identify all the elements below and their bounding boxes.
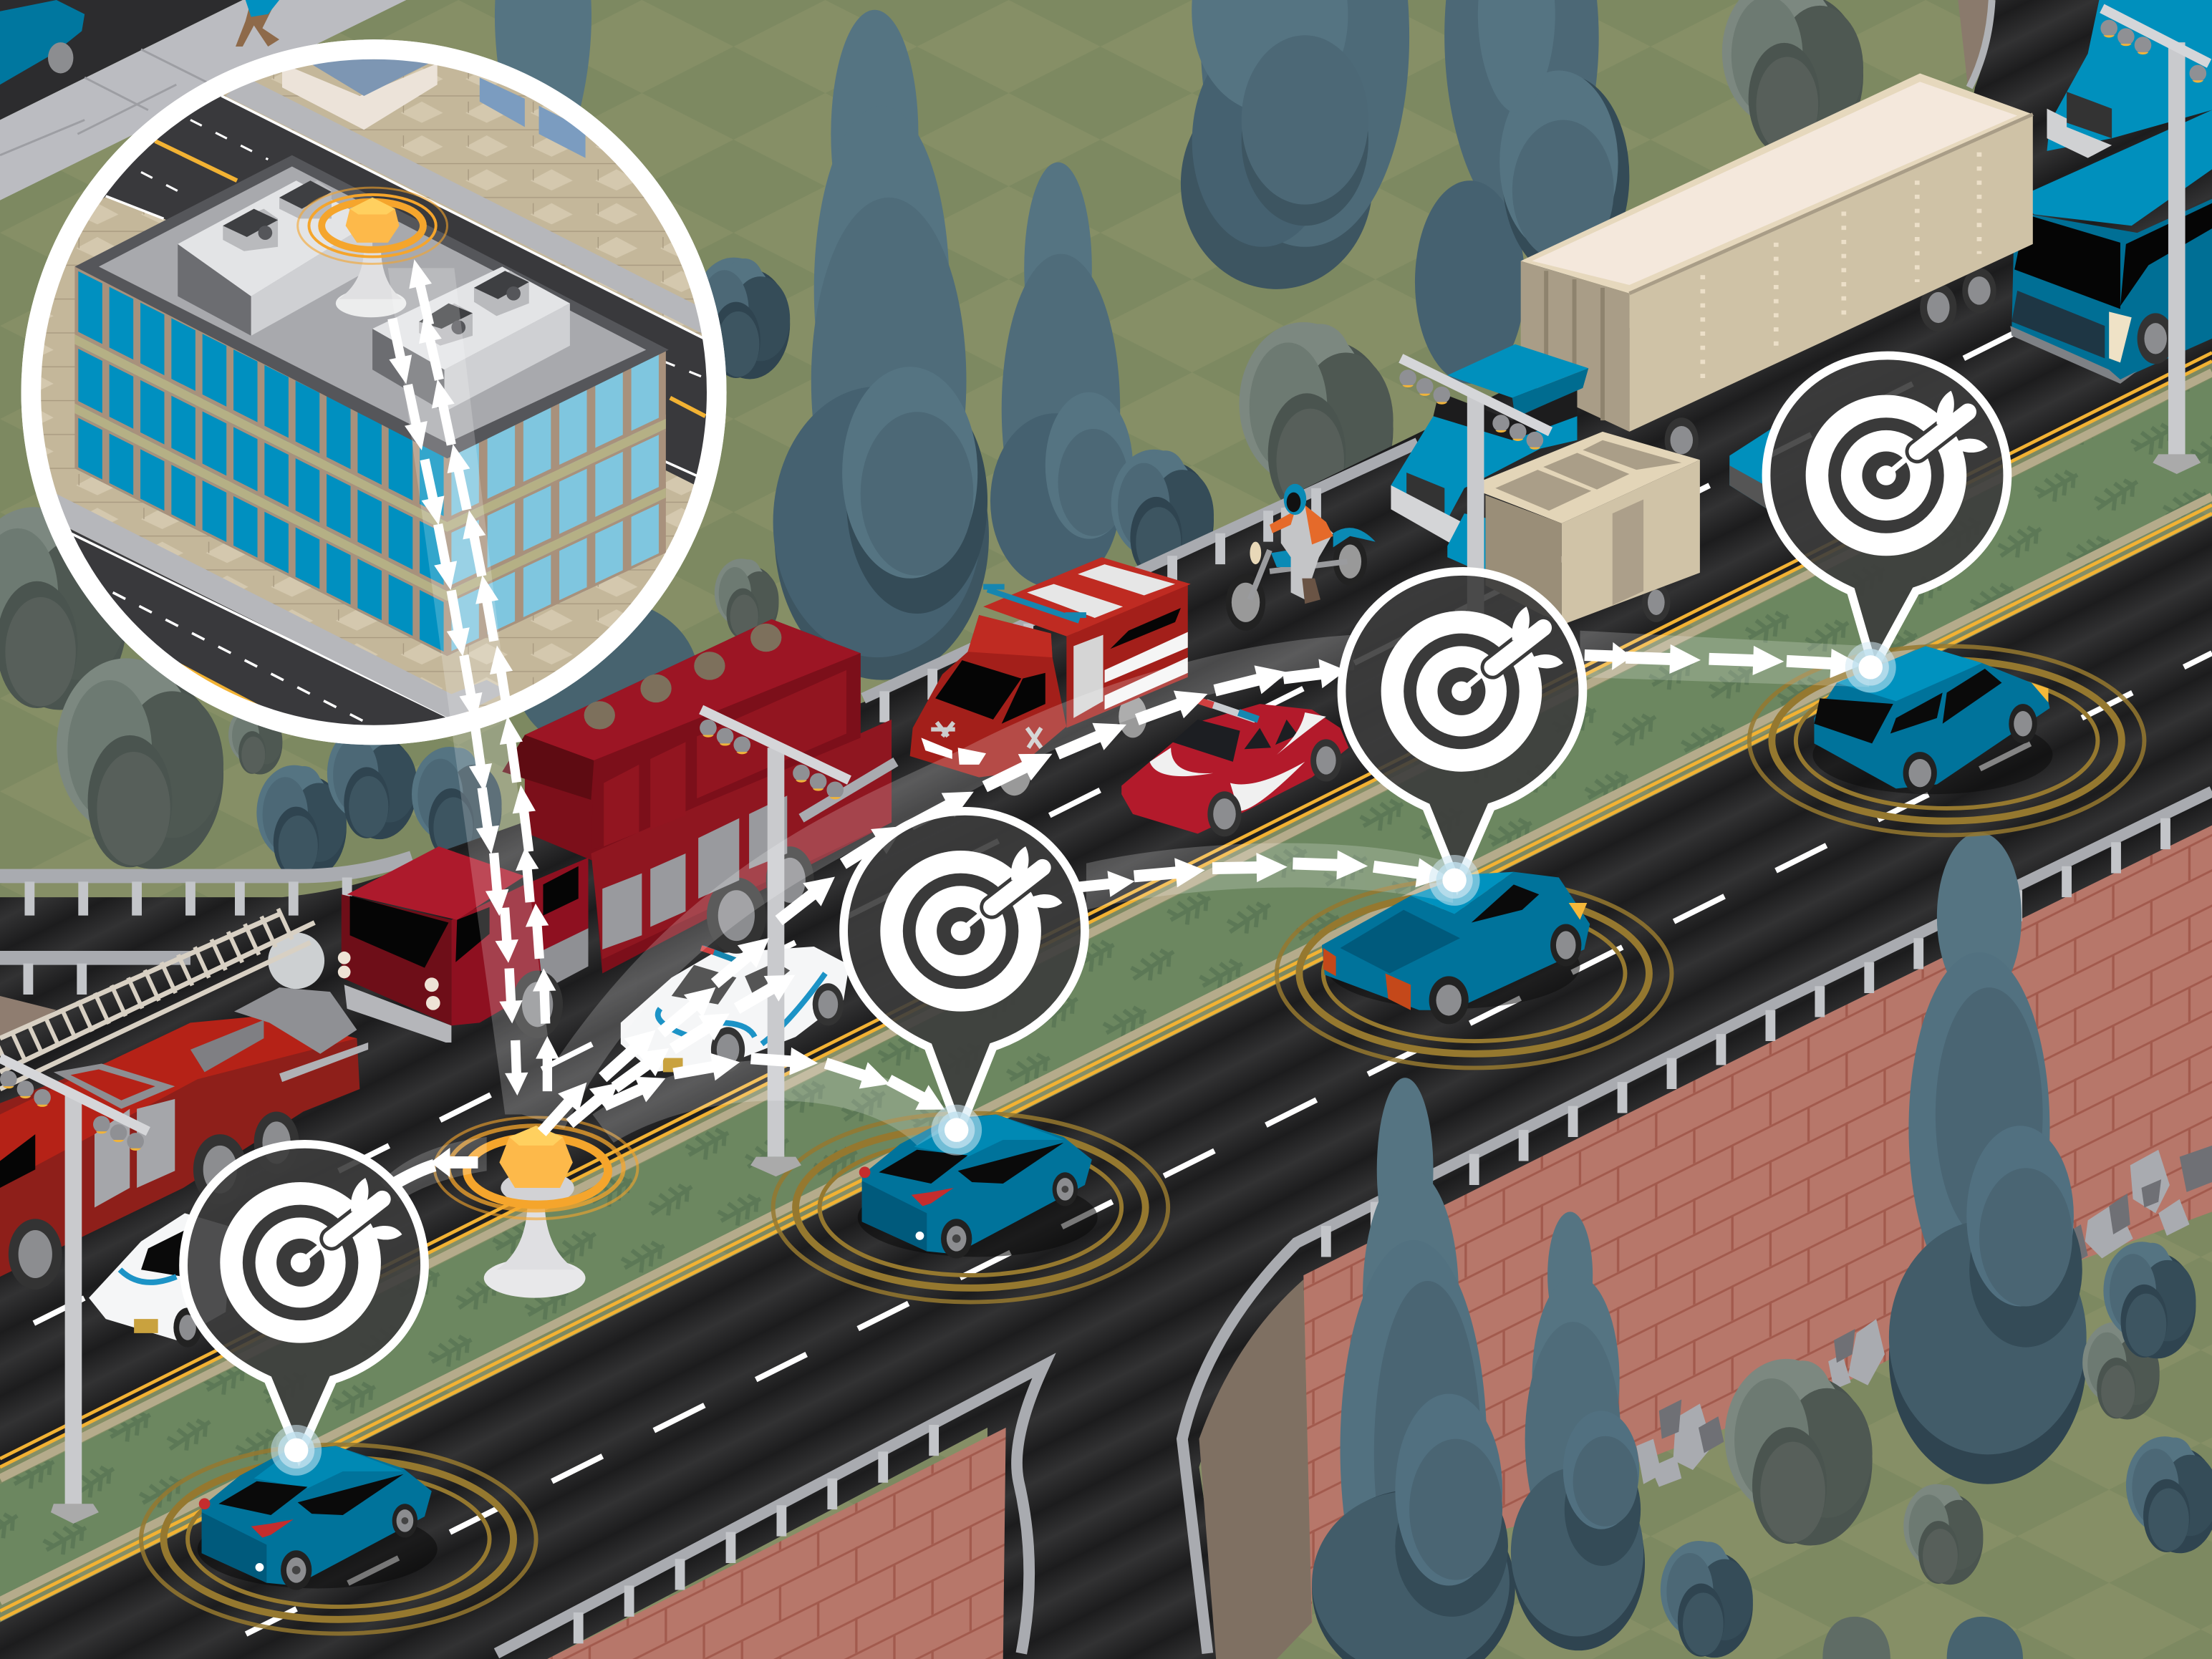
vehicle: semi trailer <box>1521 73 2033 463</box>
vehicle: second police car <box>89 1213 233 1348</box>
background tree behind inset <box>495 0 591 180</box>
vehicle: blue car behind pin <box>1729 427 1773 509</box>
inset building left facade <box>74 266 447 656</box>
round tree top centre <box>1181 0 1409 289</box>
tree beside ambulance <box>990 163 1133 589</box>
brick wall right <box>1303 826 2212 1631</box>
curved left guard rails <box>0 858 412 1038</box>
map pin 2 with target icon <box>844 811 1085 1131</box>
data arrows: beam up from beacon to rooftop <box>403 256 559 1091</box>
tall tree near fire engine <box>773 10 989 680</box>
map pin 4 with target icon <box>1766 355 2007 669</box>
underpass wall <box>1199 1280 1312 1659</box>
connected car 1 <box>198 1446 438 1590</box>
inset rooftop beacon <box>298 188 447 317</box>
rubble along wall base <box>1636 1146 2212 1487</box>
beacon on median <box>435 1117 637 1298</box>
vehicle: blue truck cab <box>1391 344 1588 543</box>
vehicle: truck behind bus <box>2047 0 2212 158</box>
translucent data beams <box>381 268 1869 1202</box>
inset paved ground <box>41 59 702 712</box>
vehicle: red sports car <box>1121 700 1348 836</box>
receiver node car 2 <box>931 1105 982 1156</box>
lower road markings <box>0 505 2212 1634</box>
connected car 2 <box>858 1114 1098 1258</box>
connected SUV <box>1812 646 2052 794</box>
foreground tree right <box>1889 832 2087 1484</box>
vehicle: blue bus <box>2010 110 2212 384</box>
data arrows: fan from beacon toward vehicles <box>392 656 1348 1185</box>
inset sidewalk lower <box>42 487 508 720</box>
street lamp 4 <box>2100 9 2209 474</box>
foreground tree middle <box>1511 1211 1645 1650</box>
signal rings car 2 <box>773 1113 1168 1302</box>
inset road markings <box>106 96 713 480</box>
top-left street with sidewalk, car and pedestrian <box>0 0 406 200</box>
street lamp 1 <box>0 1058 148 1524</box>
data arrows: beam down from rooftop to beacon <box>381 316 529 1096</box>
inset upper road <box>102 96 707 484</box>
curved road wall top right <box>1958 0 1992 87</box>
receiver node pickup <box>1429 855 1480 906</box>
vehicle: motorcycle and rider <box>1226 484 1376 631</box>
street lamp 3 <box>1399 358 1550 621</box>
vehicle: ambulance <box>910 557 1191 795</box>
lower guard rail right <box>1182 791 2212 1653</box>
lower guard rail left <box>496 1365 1044 1653</box>
inset roof <box>74 155 669 458</box>
map pin 3 with target icon <box>1341 571 1583 884</box>
street lamp 2 <box>700 710 849 1176</box>
data arrows: toward pickup <box>1071 848 1450 901</box>
connected pickup truck <box>1322 872 1590 1024</box>
vehicle: white police car <box>621 947 849 1072</box>
signal rings car 3 <box>1277 879 1671 1068</box>
inset neighbouring building <box>282 59 586 158</box>
receiver node car 1 <box>271 1425 322 1476</box>
tall tree behind trailer <box>1415 0 1629 384</box>
signal rings car 4 <box>1749 646 2144 835</box>
background shrubs <box>0 0 1863 879</box>
foreground tree left <box>1312 1078 1515 1659</box>
signal rings car 1 <box>141 1445 536 1634</box>
inset yellow lines <box>155 141 705 416</box>
inset circle: building with rooftop beacon <box>21 39 727 790</box>
vehicle: box truck <box>1447 432 1700 625</box>
inset building right facade <box>447 351 666 656</box>
vehicle: ladder truck <box>0 914 368 1290</box>
foreground shrubs <box>1661 1242 2212 1659</box>
inset roof unit left <box>178 180 372 336</box>
inset roof unit right <box>372 266 570 412</box>
upper guard rail <box>864 443 1418 722</box>
inset sidewalk upper <box>226 77 713 339</box>
data arrows: toward SUV <box>1584 642 1863 679</box>
inset lower road <box>70 528 445 725</box>
lower road <box>0 516 2212 1659</box>
upper road lane markings and yellow lines <box>0 234 2212 1467</box>
median strip <box>0 372 2212 1601</box>
brick wall left <box>547 1428 1006 1659</box>
map pin 1 with target icon <box>183 1144 425 1456</box>
receiver node SUV <box>1845 642 1896 692</box>
vehicle: fire engine <box>338 619 896 1043</box>
